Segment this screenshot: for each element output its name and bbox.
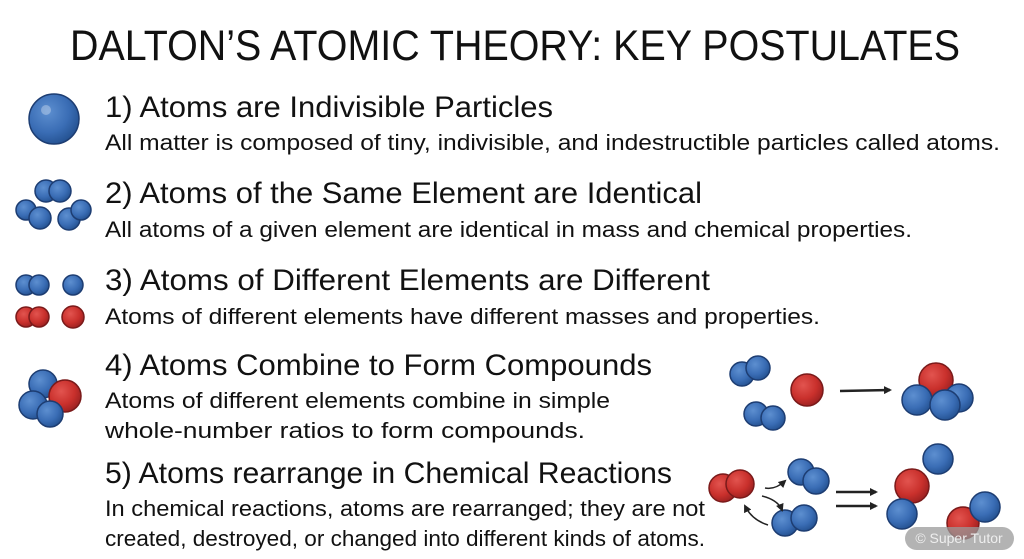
heading 4: 4) Atoms Combine to Form Compounds	[105, 349, 652, 382]
diagram: compound formation	[730, 356, 973, 430]
text 1: All matter is composed of tiny, indivisible, and indestructible particles called atoms.	[105, 130, 1000, 155]
diagram: rearrangement	[709, 444, 1000, 539]
heading 3: 3) Atoms of Different Elements are Different	[105, 264, 711, 297]
icon: compound	[19, 370, 81, 427]
heading 5: 5) Atoms rearrange in Chemical Reactions	[105, 457, 672, 490]
text 4: Atoms of different elements combine in simple	[105, 388, 610, 413]
text 2: All atoms of a given element are identical in mass and chemical properties.	[105, 217, 912, 242]
heading 2: 2) Atoms of the Same Element are Identical	[105, 177, 702, 210]
watermark: © Super Tutor	[915, 530, 1003, 546]
title: DALTON’S ATOMIC THEORY: KEY POSTULATES	[70, 22, 960, 70]
icon: single atom	[29, 94, 79, 144]
text 3: Atoms of different elements have different masses and properties.	[105, 304, 820, 329]
text 4: whole-number ratios to form compounds.	[104, 418, 585, 443]
icon: identical atoms	[16, 180, 91, 230]
text 5: created, destroyed, or changed into different kinds of atoms.	[105, 526, 705, 551]
icon: different elements	[16, 275, 84, 328]
watermark	[905, 527, 1014, 550]
text 5: In chemical reactions, atoms are rearranged; they are not	[105, 496, 705, 521]
heading 1: 1) Atoms are Indivisible Particles	[105, 91, 553, 124]
